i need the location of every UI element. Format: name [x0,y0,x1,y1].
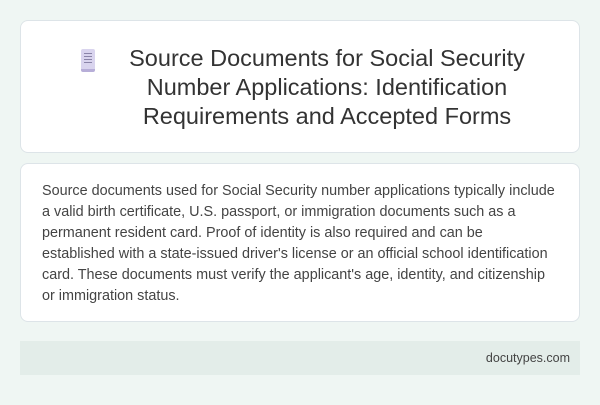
footer text: docutypes.com [486,351,570,365]
text block: description: established with a state-issued driver's license or an official school identification [42,246,548,262]
panel: description [20,163,580,322]
panel: title card [20,20,580,153]
title: Source Documents for Social Security Number Applications: Identification Requirements and Accepted Forms [129,45,525,129]
footer [20,341,580,375]
text block: description: Source documents used for Social Security number applications typically include [42,183,555,199]
text block: description [42,183,555,304]
text block: description: or immigration status. [42,288,180,304]
text block: description: permanent resident card. Proof of identity is also required and can be [42,225,483,241]
text block: description: a valid birth certificate, U.S. passport, or immigration documents such as a [42,204,516,220]
text block: description: card. These documents must verify the applicant's age, identity, and citizenship [42,267,545,283]
icon: document [81,49,95,72]
